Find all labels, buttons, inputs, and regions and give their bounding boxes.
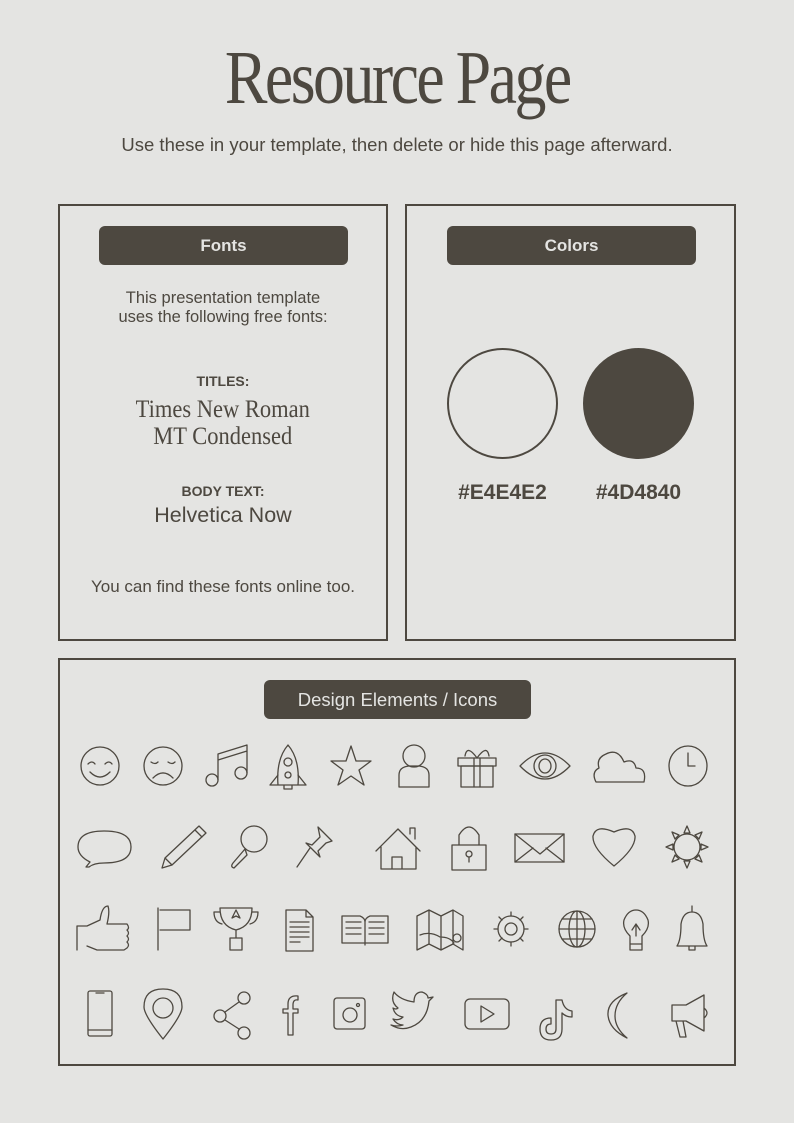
icon: megaphone [672,995,707,1037]
icon: trophy [214,908,258,950]
icon: moon [608,993,627,1038]
hex light: #E4E4E2 [458,481,547,504]
colors header: Colors [545,236,598,255]
colors header [447,226,696,265]
icon: cloud [594,752,645,782]
icon: gift [458,750,496,787]
icon: thumbs up [77,906,128,950]
icon: music [206,745,247,786]
fonts footer text: You can find these fonts online too. [91,577,355,596]
icon: bell [677,906,707,950]
icon: house [376,828,420,869]
titles font name [136,396,310,450]
icon: lock [452,827,486,870]
icon: location pin [144,989,182,1039]
design header: Design Elements / Icons [298,689,497,710]
icon: map [417,910,463,950]
swatch: dark [583,348,694,459]
icon: eye [520,753,570,779]
icon: bulb [624,910,648,950]
icon: share [214,992,250,1039]
icon: pin [297,827,332,867]
icon: tiktok [540,1000,572,1040]
icon: twitter [391,992,433,1029]
body font name: Helvetica Now [154,503,292,527]
icon: book [342,916,388,945]
icon: user [399,745,429,787]
icon: star [331,746,371,785]
icon: youtube [465,999,509,1029]
icon: globe [559,911,595,947]
fonts intro text: This presentation template [126,289,320,307]
titles font name: Times New Roman [136,396,310,423]
icon: sun [666,826,708,868]
icon: mail [515,834,564,862]
design header [264,680,531,719]
title: Resource Page [225,36,569,120]
icon: phone [88,991,112,1036]
fonts intro text: uses the following free fonts: [118,308,328,326]
fonts header: Fonts [200,236,247,255]
panel: fonts [58,204,388,641]
swatch: light [447,348,558,459]
icon: speech [78,831,131,867]
icon: clock [669,746,707,786]
icon: magnifier [232,826,267,868]
icon: document [286,910,313,951]
body text label: BODY TEXT: [182,483,264,499]
icon: pencil [162,826,206,868]
subtitle: Use these in your template, then delete or hide this page afterward. [121,134,673,155]
icon: flag [158,908,190,950]
titles label: TITLES: [197,373,249,389]
icon: facebook [283,996,298,1035]
icon: gear [494,912,528,946]
titles font name: MT Condensed [154,423,292,450]
icon: sad [144,747,182,785]
icon: smile [81,747,119,785]
icon: heart [593,829,635,866]
fonts header [99,226,348,265]
panel: design elements [58,658,736,1066]
panel: colors [405,204,736,641]
icon: rocket [270,745,306,789]
hex dark: #4D4840 [596,481,681,504]
fonts intro text [118,289,328,326]
icon: instagram [334,998,365,1029]
